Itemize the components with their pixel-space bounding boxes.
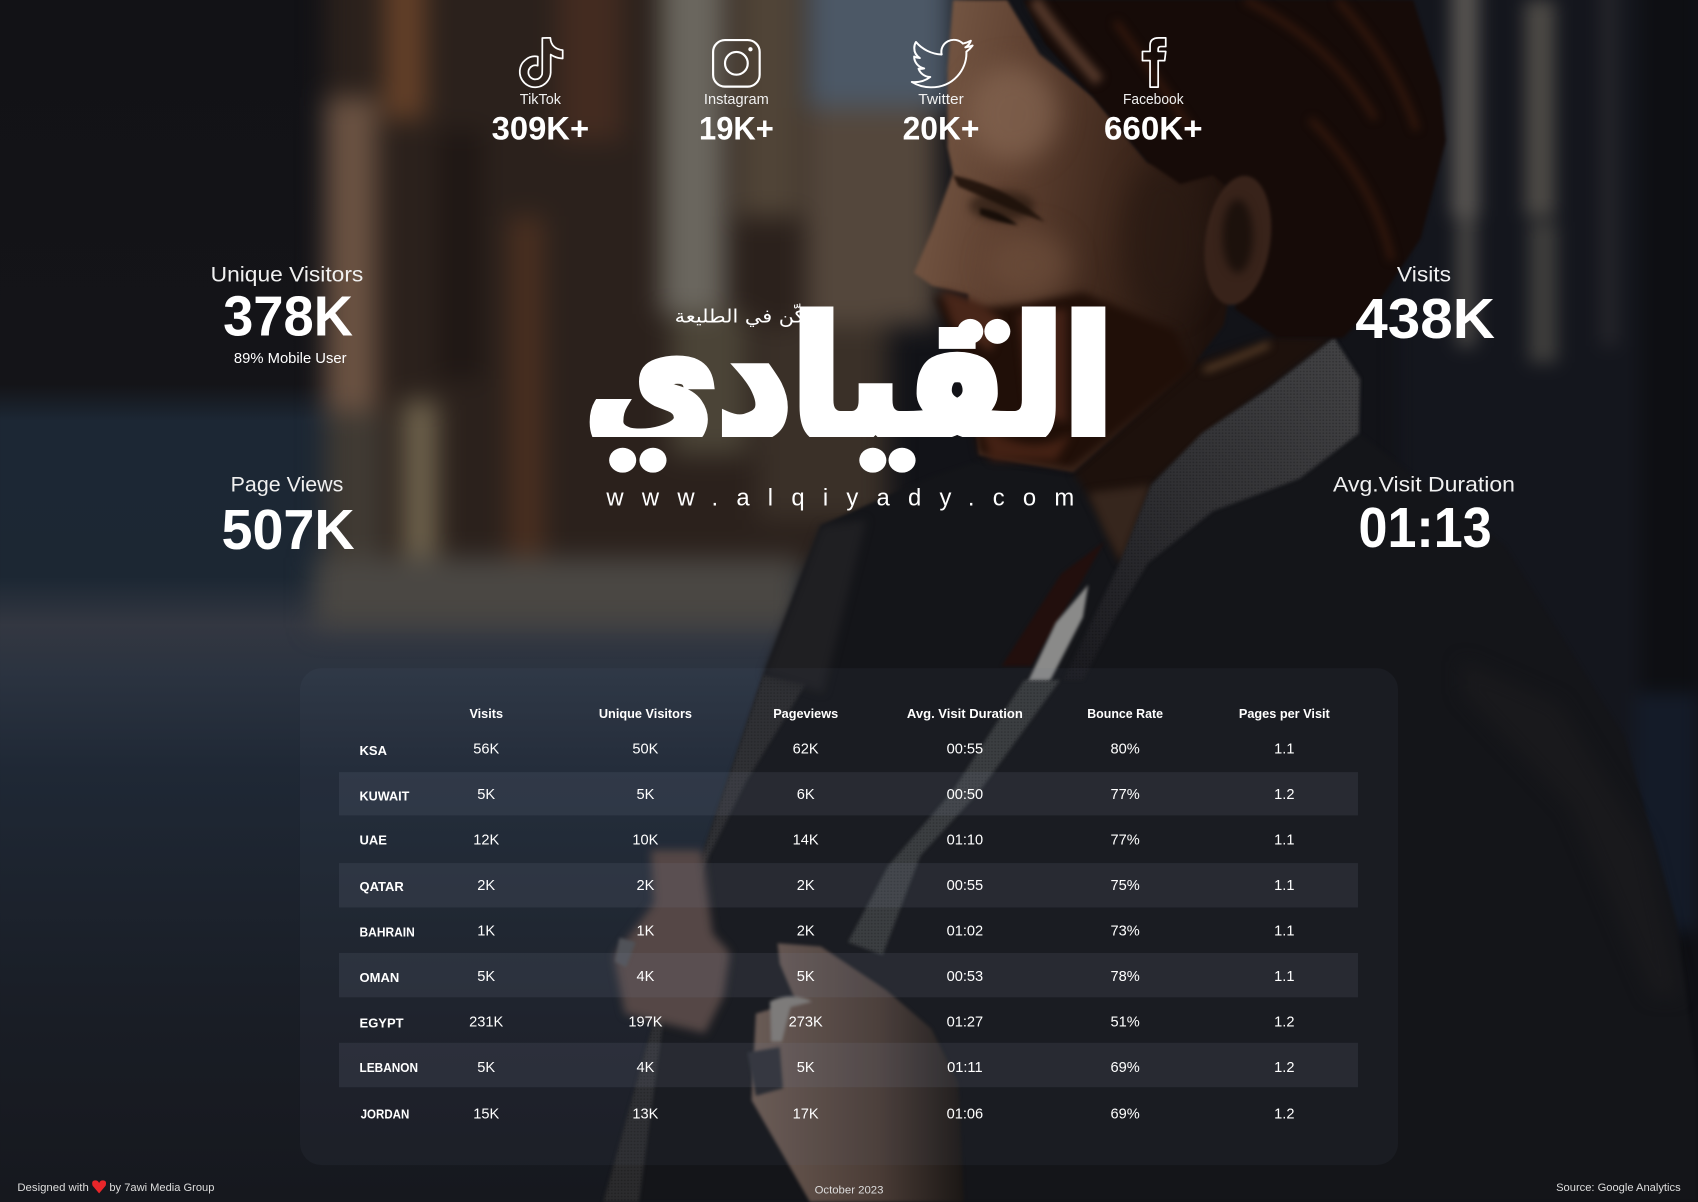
table header: Pageviews — [773, 706, 838, 721]
stat: Page Views: 507K — [221, 498, 355, 561]
row: Qatar: 2K — [477, 878, 495, 894]
row: KSA — [360, 742, 1294, 758]
icon: TikTok — [520, 38, 563, 87]
background photo: man — [603, 0, 1698, 1202]
row: Jordan — [361, 1107, 1294, 1123]
row: Bahrain: 1K — [636, 924, 655, 940]
row: Egypt: 197K — [628, 1015, 663, 1031]
row: Egypt: 1.2 — [1274, 1015, 1294, 1031]
stat: Avg. Visit Duration: Avg.Visit Duration — [1333, 472, 1515, 497]
table header: Visits — [469, 706, 503, 721]
row: Jordan: 01:06 — [947, 1107, 983, 1123]
row: Lebanon: 1.2 — [1274, 1060, 1294, 1076]
title: القيادي — [585, 283, 1113, 476]
inner lining — [1002, 541, 1105, 666]
right lapel — [848, 680, 1060, 955]
stat: Unique Visitors: Unique Visitors — [211, 262, 364, 287]
icon: heart — [92, 1180, 106, 1193]
row: KSA: 62K — [793, 742, 819, 758]
row: Bahrain: 1.1 — [1274, 924, 1294, 940]
row: Qatar: 1.1 — [1274, 878, 1294, 894]
table header — [469, 706, 1330, 721]
left lapel — [603, 675, 807, 1202]
row: KSA: 80% — [1111, 742, 1140, 758]
row: Qatar: QATAR — [360, 879, 404, 894]
row: Jordan: 13K — [632, 1107, 659, 1123]
right hand — [752, 943, 964, 1202]
ear — [1197, 172, 1279, 309]
stat: Visits: Visits — [1397, 262, 1451, 287]
stat: Avg. Visit Duration — [1333, 472, 1515, 559]
social stat: Instagram: 19K+ — [699, 111, 774, 147]
stat: Avg. Visit Duration: 01:13 — [1358, 496, 1492, 559]
row: Qatar: 00:55 — [947, 878, 983, 894]
row: Lebanon: 5K — [797, 1060, 815, 1076]
footer: date: October 2023 — [815, 1184, 883, 1196]
social stat: Facebook: 660K+ — [1104, 111, 1203, 147]
row: Jordan: 1.2 — [1274, 1107, 1294, 1123]
icon: Twitter — [912, 40, 973, 87]
stat: Unique Visitors — [211, 262, 364, 367]
row: Oman: OMAN — [360, 970, 399, 985]
icon: Facebook — [1142, 38, 1166, 87]
row: KSA: KSA — [360, 743, 388, 758]
stat: Unique Visitors: 378K — [223, 285, 353, 348]
row: Kuwait: 5K — [477, 787, 495, 803]
row: Kuwait: KUWAIT — [360, 788, 409, 803]
collar — [1063, 338, 1360, 680]
row: Egypt: 01:27 — [947, 1015, 983, 1031]
row: Oman: 00:53 — [947, 969, 983, 985]
social stat: Instagram — [699, 40, 774, 147]
social stat: Twitter — [903, 40, 979, 147]
row: KSA: 00:55 — [947, 742, 983, 758]
left road — [0, 0, 866, 1202]
row: Egypt: 231K — [469, 1015, 504, 1031]
footer: credit: Designed with — [17, 1182, 89, 1194]
row: Kuwait: 77% — [1111, 787, 1140, 803]
social stat: TikTok — [492, 38, 589, 147]
table header: Pages per Visit — [1239, 706, 1330, 721]
row: Jordan: 17K — [793, 1107, 819, 1123]
row: KSA: 1.1 — [1274, 742, 1294, 758]
row: UAE: 10K — [632, 833, 659, 849]
icon: Instagram — [713, 40, 760, 87]
stat: Page Views: Page Views — [231, 472, 343, 497]
social stat: TikTok: 309K+ — [492, 111, 589, 147]
row: Kuwait — [360, 787, 1294, 803]
row: UAE — [360, 833, 1294, 849]
row: Oman — [360, 969, 1294, 985]
shirt — [1027, 585, 1088, 684]
row: Lebanon: LEBANON — [360, 1060, 418, 1075]
footer: source: Source: Google Analytics — [1556, 1182, 1681, 1194]
buildings — [314, 0, 953, 628]
footer: credit: by 7awi Media Group — [109, 1182, 214, 1194]
row: Egypt: 273K — [789, 1015, 823, 1031]
row: KSA: 56K — [473, 742, 499, 758]
table header: Unique Visitors — [599, 706, 692, 721]
brow and eye — [953, 175, 1045, 222]
row: Bahrain: 1K — [477, 924, 495, 940]
table header: Avg. Visit Duration — [907, 706, 1023, 721]
panel: country table — [300, 668, 1398, 1165]
row: Kuwait: 5K — [636, 787, 655, 803]
coat — [603, 338, 1698, 1202]
beard — [933, 292, 1191, 468]
row: UAE: UAE — [360, 833, 387, 848]
row: Qatar: 2K — [797, 878, 815, 894]
row: Jordan: 15K — [473, 1107, 499, 1123]
row: Bahrain: BAHRAIN — [360, 925, 415, 940]
right stripes — [1397, 0, 1698, 1202]
social stat: Facebook: Facebook — [1123, 91, 1184, 108]
stat: Visits: 438K — [1355, 287, 1495, 350]
row: KSA: 50K — [632, 742, 659, 758]
row: Egypt: 51% — [1111, 1015, 1140, 1031]
row: Bahrain: 01:02 — [947, 924, 983, 940]
row: Bahrain: 2K — [797, 924, 815, 940]
social stat: Instagram: Instagram — [704, 91, 769, 108]
tagline: كّن في الطليعة — [675, 304, 805, 328]
stat: Visits — [1355, 262, 1495, 350]
row: Oman: 78% — [1111, 969, 1140, 985]
row: UAE: 14K — [793, 833, 819, 849]
row: Oman: 4K — [636, 969, 655, 985]
row: Jordan: 69% — [1111, 1107, 1140, 1123]
row: Lebanon: 5K — [477, 1060, 495, 1076]
stat: Unique Visitors: 89% Mobile User — [234, 351, 347, 367]
row: Lebanon: 01:11 — [947, 1060, 983, 1076]
website: www.alqiyady.com — [605, 485, 1074, 512]
row: Egypt: EGYPT — [360, 1016, 404, 1031]
row: Lebanon: 4K — [636, 1060, 655, 1076]
row: UAE: 01:10 — [947, 833, 983, 849]
row: UAE: 1.1 — [1274, 833, 1294, 849]
title dots — [609, 319, 1010, 473]
row: Egypt — [360, 1015, 1294, 1031]
row: Qatar: 75% — [1111, 878, 1140, 894]
row: Kuwait: 00:50 — [947, 787, 983, 803]
row: Lebanon: 69% — [1111, 1060, 1140, 1076]
logo: Alqiyady — [590, 304, 1106, 510]
hair — [1023, 0, 1446, 338]
row: UAE: 77% — [1111, 833, 1140, 849]
row: Lebanon — [360, 1060, 1294, 1076]
row: UAE: 12K — [473, 833, 499, 849]
social stat: Facebook — [1104, 38, 1203, 147]
row: Kuwait: 6K — [797, 787, 815, 803]
row: Kuwait: 1.2 — [1274, 787, 1294, 803]
social stat: Twitter: 20K+ — [903, 111, 979, 147]
social stat: TikTok: TikTok — [520, 91, 561, 108]
row: Qatar — [360, 878, 1294, 894]
row: Oman: 1.1 — [1274, 969, 1294, 985]
row: Oman: 5K — [477, 969, 495, 985]
row: Bahrain: 73% — [1111, 924, 1140, 940]
row: Jordan: JORDAN — [361, 1107, 409, 1122]
left hand — [614, 850, 730, 1033]
table header: Bounce Rate — [1087, 706, 1163, 721]
row: Oman: 5K — [797, 969, 815, 985]
footer: credit — [17, 1180, 214, 1194]
row: Qatar: 2K — [636, 878, 655, 894]
neck — [975, 336, 1334, 563]
rings — [770, 996, 812, 1042]
social stat: Twitter: Twitter — [918, 91, 964, 108]
face — [914, 0, 1245, 472]
row: Bahrain — [360, 924, 1294, 940]
